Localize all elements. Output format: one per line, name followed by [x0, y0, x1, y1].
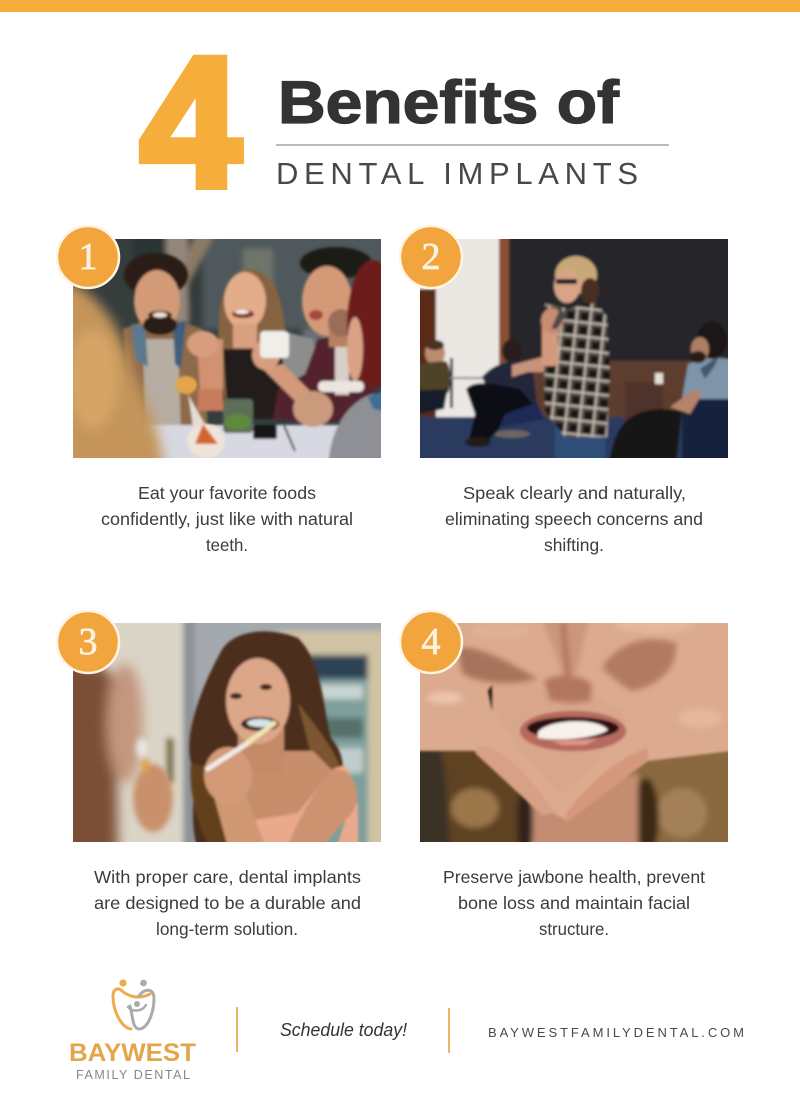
badge 2: 2 [422, 236, 440, 278]
text: benefit 3: long-term solution. [156, 919, 298, 939]
badge 3 [57, 611, 119, 673]
badge 4 [400, 611, 462, 673]
photo: woman speaking on stage [420, 239, 728, 458]
badge 1: 1 [78, 236, 98, 278]
text: benefit 4: Preserve jawbone health, prevent [443, 867, 705, 887]
panel 1: eating [43, 219, 403, 555]
text: benefit 2 [445, 483, 703, 555]
icon: tooth with family [113, 979, 154, 1029]
top accent bar [0, 0, 800, 12]
text: benefit 1: teeth. [206, 535, 248, 555]
title block [140, 20, 638, 226]
text: benefit 4: structure. [539, 919, 609, 939]
text: benefit 3: With proper care, dental implants [94, 867, 361, 887]
wordmark: BAYWEST [69, 1039, 196, 1067]
panel 2: speaking [400, 219, 748, 555]
text: benefit 3: are designed to be a durable and [94, 893, 361, 913]
photo: friends eating [73, 239, 381, 458]
text: benefit 4 [443, 867, 705, 939]
badge 4: 4 [422, 621, 440, 663]
text: benefit 3 [94, 867, 361, 939]
website: BAYWESTFAMILYDENTAL.COM [488, 1025, 744, 1040]
text: benefit 2: shifting. [544, 535, 604, 555]
subheading: Dental Implants: DENTAL IMPLANTS [276, 156, 638, 191]
text: benefit 1: confidently, just like with natural [101, 509, 353, 529]
call to action: Schedule today! [280, 1019, 407, 1040]
badge 3: 3 [78, 621, 98, 663]
panel 4: jawbone [400, 603, 750, 939]
heading: Benefits of: Benefits of [278, 69, 620, 136]
text: benefit 2: eliminating speech concerns and [445, 509, 703, 529]
photo: smile framed by heart hands [420, 623, 728, 842]
photo: woman brushing teeth [73, 623, 381, 842]
text: benefit 1 [101, 483, 353, 555]
tagline: FAMILY DENTAL [76, 1068, 190, 1082]
panel 3: care [43, 603, 401, 939]
badge 1 [57, 226, 119, 288]
text: benefit 4: bone loss and maintain facial [458, 893, 690, 913]
text: benefit 1: Eat your favorite foods [138, 483, 316, 503]
logo: Baywest Family Dental [69, 979, 196, 1082]
badge 2 [400, 226, 462, 288]
big numeral 4: 4 [140, 20, 241, 226]
text: benefit 2: Speak clearly and naturally, [463, 483, 686, 503]
